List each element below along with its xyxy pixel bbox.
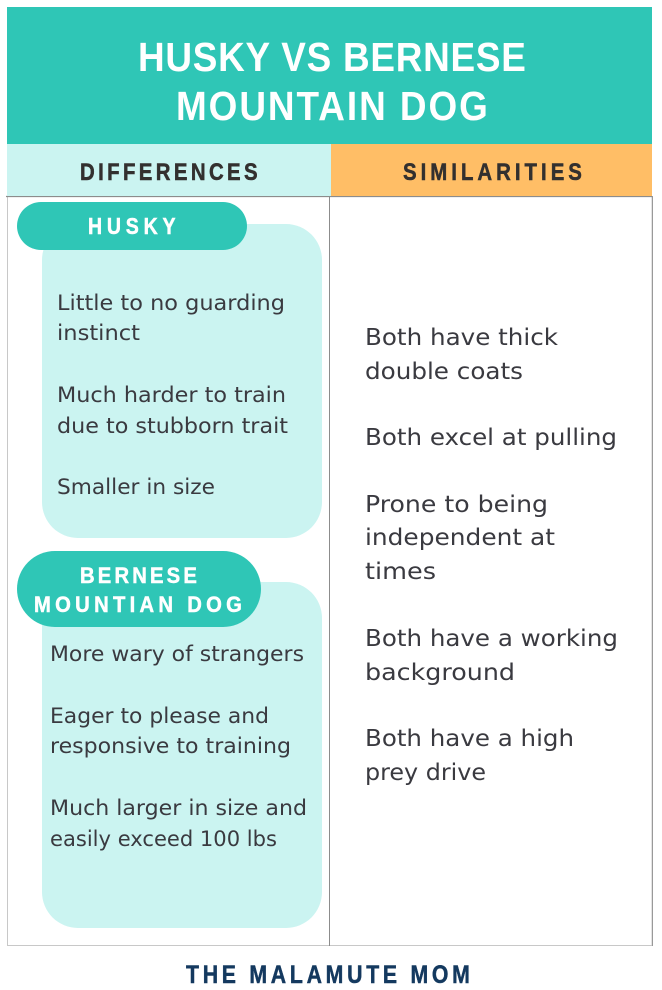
panel: husky <box>17 202 322 538</box>
title banner <box>7 7 652 144</box>
badge: bernese mountain dog: MOUNTIAN DOG <box>34 593 242 617</box>
husky traits: Little to no guarding <box>57 291 285 315</box>
title banner: MOUNTAIN DOG <box>176 84 488 129</box>
husky traits: Much harder to train <box>57 383 286 407</box>
similarities list: double coats <box>365 357 523 385</box>
panel: table outline <box>6 196 652 946</box>
husky traits: instinct <box>57 321 140 345</box>
bernese traits: responsive to training <box>50 734 291 758</box>
panel: bernese mountain dog <box>17 551 322 928</box>
bernese traits <box>50 642 307 851</box>
similarities list <box>365 323 618 786</box>
similarities list: background <box>365 658 515 686</box>
heading: differences <box>7 144 331 196</box>
badge: husky: HUSKY <box>88 214 176 239</box>
badge: bernese mountain dog <box>17 551 261 627</box>
footer brand: THE MALAMUTE MOM <box>186 960 470 988</box>
title banner: HUSKY VS BERNESE <box>138 35 526 80</box>
similarities list: Both have a high <box>365 724 574 752</box>
bernese traits: More wary of strangers <box>50 642 304 666</box>
similarities list: Both have a working <box>365 624 618 652</box>
similarities list: independent at <box>365 523 555 551</box>
bernese traits: easily exceed 100 lbs <box>50 827 277 851</box>
similarities list: Both have thick <box>365 323 558 351</box>
similarities list: Both excel at pulling <box>365 423 617 451</box>
bernese traits: Eager to please and <box>50 704 269 728</box>
husky traits: Smaller in size <box>57 475 215 499</box>
similarities list: Prone to being <box>365 490 548 518</box>
husky traits <box>57 291 288 499</box>
badge: bernese mountain dog: BERNESE <box>80 564 197 588</box>
heading: similarities: SIMILARITIES <box>403 158 582 185</box>
heading: differences: DIFFERENCES <box>80 158 258 185</box>
badge: husky <box>17 202 247 250</box>
husky traits: due to stubborn trait <box>57 414 288 438</box>
heading: similarities <box>331 144 652 196</box>
similarities list: times <box>365 557 436 585</box>
similarities list: prey drive <box>365 758 486 786</box>
bernese traits: Much larger in size and <box>50 796 307 820</box>
